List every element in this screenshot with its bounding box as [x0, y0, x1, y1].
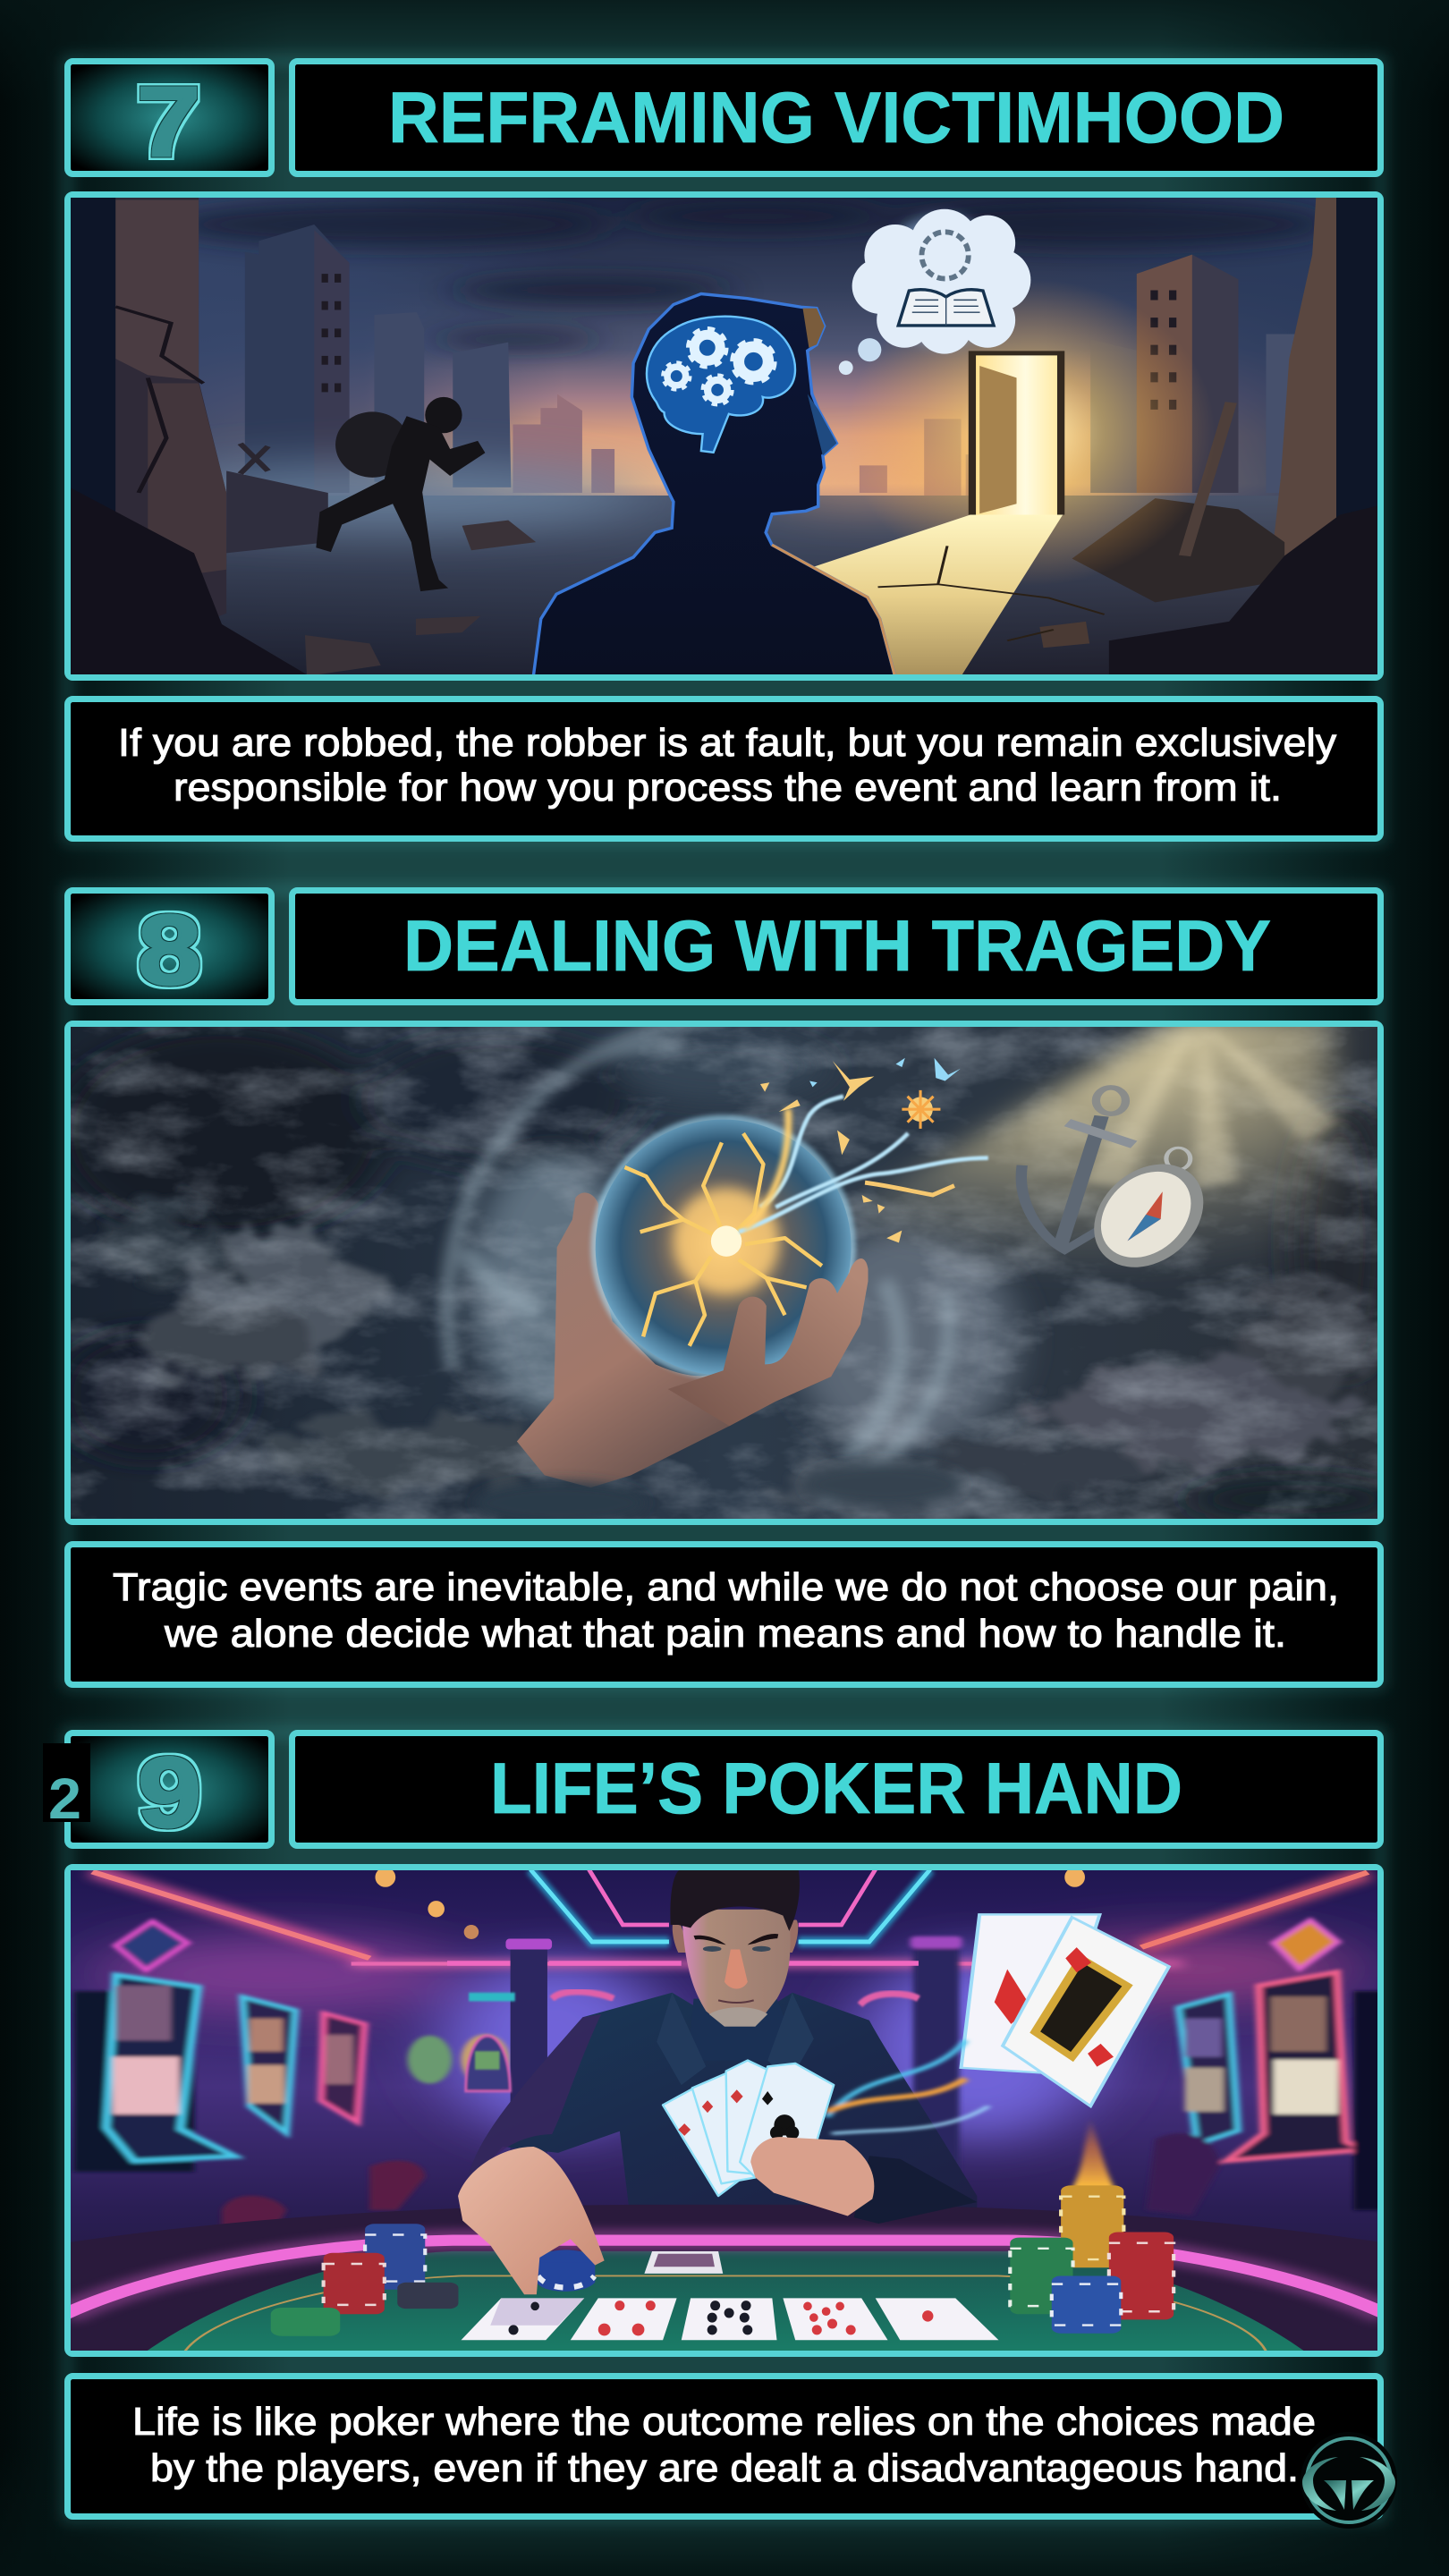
- swirling cloud streaks: [447, 1016, 949, 1496]
- fingers in front of orb: [668, 1258, 868, 1426]
- number badge 8: [68, 891, 272, 1005]
- number badge 9: 9: [138, 1738, 201, 1848]
- left slot machines: [74, 1921, 509, 2226]
- title bar: LIFE’S POKER HAND: [490, 1749, 1182, 1829]
- caption text box: [68, 699, 1381, 839]
- soft room light: [92, 1936, 1359, 2139]
- thief running with sack: [316, 397, 485, 591]
- page number tab: [43, 1743, 90, 1831]
- light rays from upper right: [832, 1018, 1340, 1286]
- ground: [216, 440, 1260, 674]
- section 9: [64, 1733, 1386, 2517]
- dealing hand: [458, 2147, 605, 2294]
- number badge 9: [68, 1733, 272, 1848]
- anchor: [1021, 1088, 1134, 1250]
- storm clouds: [55, 1023, 1395, 1521]
- chips under dealing hand: [537, 2250, 595, 2292]
- caption text box: Tragic events are inevitable, and while we do not choose our pain,: [113, 1565, 1339, 1609]
- released light stream and birds: [739, 1058, 988, 1242]
- title bar: [292, 1733, 1381, 1846]
- neon ceiling lines: [92, 1868, 1368, 1963]
- caption text box: If you are robbed, the robber is at fault, but you remain exclusively: [118, 721, 1336, 765]
- caption text box: responsible for how you process the event and learn from it.: [174, 766, 1282, 809]
- number badge 8: 8: [138, 895, 201, 1005]
- player jacket: [466, 1993, 977, 2227]
- illustration panel: poker player in neon casino: [64, 1868, 1386, 2358]
- caption text box: [68, 2376, 1381, 2517]
- deck on table: [644, 2251, 723, 2274]
- caption text box: by the players, even if they are dealt a disadvantageous hand.: [150, 2446, 1299, 2490]
- player head: [670, 1869, 800, 2027]
- man silhouette with glowing brain: [533, 209, 1030, 677]
- cracked glowing orb: [591, 1114, 856, 1380]
- left chip stacks: [271, 2224, 458, 2336]
- ceiling neon around player: [447, 1869, 930, 1963]
- community cards: [461, 2298, 998, 2340]
- hand of cards: [663, 2061, 834, 2196]
- table rim and neon: [64, 2205, 1386, 2358]
- number badge 7: 7: [137, 67, 200, 177]
- glowing brain with gears: [647, 317, 795, 453]
- felt gold line: [185, 2275, 1266, 2351]
- thought bubble with spinner and book: [839, 209, 1030, 375]
- compass: [1077, 1148, 1220, 1274]
- hand palm and thumb: [517, 1192, 831, 1487]
- player hand holding cards: [750, 2137, 977, 2224]
- cloud covering the wrist: [474, 1463, 963, 1524]
- light from open door: [814, 286, 1207, 674]
- distant city: [245, 225, 1317, 504]
- illustration panel: storm, hand with cracked orb, anchor and compass: [55, 1016, 1395, 1524]
- title bar: DEALING WITH TRAGEDY: [403, 906, 1271, 987]
- caption text box: [68, 1544, 1381, 1685]
- section 8: [55, 891, 1395, 1685]
- flying cards and energy trail: [827, 1914, 1169, 2133]
- illustration panel: thief, thinking man, open door: [64, 194, 1386, 678]
- logo badge: [1301, 2432, 1397, 2529]
- right chip stacks with flame: [1010, 2117, 1174, 2334]
- page number tab: 2: [48, 1767, 81, 1831]
- caption text box: we alone decide what that pain means and how to handle it.: [164, 1612, 1286, 1656]
- title bar: REFRAMING VICTIMHOOD: [388, 78, 1284, 158]
- right slot machines: [911, 1920, 1386, 2216]
- title bar: [292, 891, 1381, 1002]
- left ruined wall: [64, 194, 536, 676]
- title bar: [292, 61, 1381, 174]
- number badge 7: [68, 61, 272, 177]
- section 7: [64, 61, 1386, 839]
- background pillar: [466, 1938, 919, 2208]
- caption text box: Life is like poker where the outcome relies on the choices made: [132, 2400, 1316, 2444]
- man silhouette: [533, 293, 895, 677]
- right ruined wall and rubble: [1039, 194, 1386, 676]
